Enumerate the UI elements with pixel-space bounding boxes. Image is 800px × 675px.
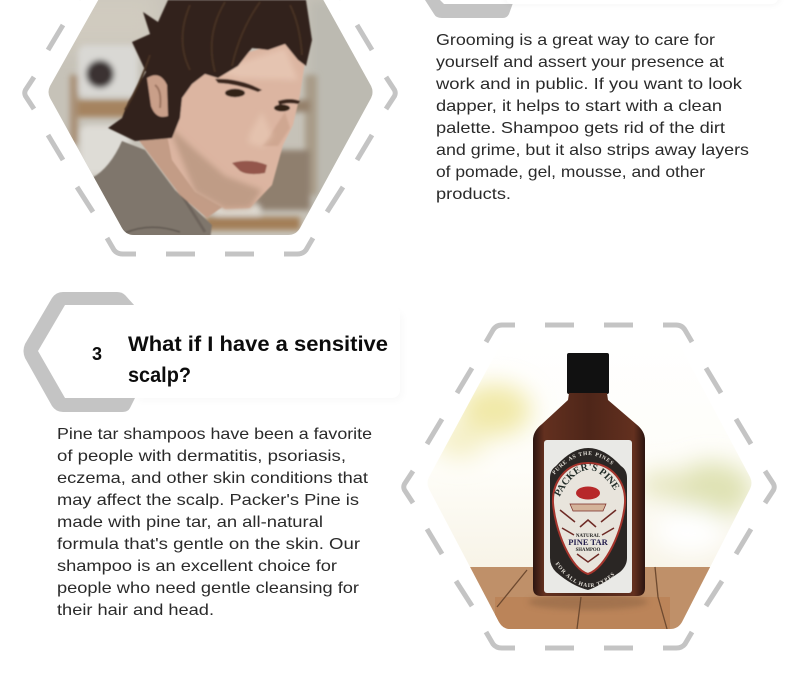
text: grooming paragraph: Grooming is a great way to care for — [436, 32, 716, 49]
text: sensitive scalp paragraph: people who need gentle cleansing for — [57, 580, 360, 597]
man figure — [92, 0, 312, 240]
heading: What if I have a sensitive — [128, 333, 388, 356]
eyes — [225, 89, 245, 97]
lips — [232, 161, 267, 174]
number badge: inner white — [38, 305, 140, 398]
section 2 header fragment — [425, 0, 780, 18]
text: sensitive scalp paragraph: made with pine tar, an all-natural — [57, 514, 323, 531]
face — [165, 40, 305, 209]
text: sensitive scalp paragraph: formula that's gentle on the skin. Our — [57, 536, 361, 553]
text: grooming paragraph: and grime, but it also strips away layers — [436, 142, 749, 159]
nose — [265, 114, 290, 146]
brows — [215, 79, 262, 92]
wood table — [470, 567, 710, 629]
bottle label: PINE TAR — [568, 537, 609, 547]
neck — [139, 138, 222, 217]
section 3 header: scalp? — [128, 364, 191, 387]
text: grooming paragraph: products. — [436, 186, 511, 203]
text: sensitive scalp paragraph: Pine tar shampoos have been a favorite — [57, 426, 372, 443]
number 3: 3 — [92, 344, 102, 364]
text: grooming paragraph: of pomade, gel, mousse, and other — [436, 164, 706, 181]
text: sensitive scalp paragraph: may affect the scalp. Packer's Pine is — [57, 492, 359, 509]
ear — [147, 75, 168, 119]
text: grooming paragraph — [435, 32, 749, 203]
text: sensitive scalp paragraph: their hair and head. — [57, 602, 214, 619]
photo: shampoo bottle in hexagon — [428, 353, 752, 629]
text: sensitive scalp paragraph: of people with dermatitis, psoriasis, — [57, 448, 346, 465]
bottle label: PACKER'S PINE — [554, 464, 620, 497]
blurred background blobs — [434, 384, 752, 554]
number badge: gray hexagon — [24, 292, 135, 412]
text: sensitive scalp paragraph: eczema, and other skin conditions that — [57, 470, 369, 487]
hair — [108, 0, 312, 141]
bottle label: SHAMPOO — [576, 548, 601, 553]
blurred background shelf right — [205, 75, 317, 230]
bottle label — [544, 440, 632, 593]
bottle label: FOR ALL HAIR TYPES — [555, 562, 614, 588]
bottle label: NATURAL — [576, 534, 601, 539]
text: grooming paragraph: palette. Shampoo gets rid of the dirt — [436, 120, 726, 137]
text: sensitive scalp paragraph — [57, 426, 372, 619]
dashed hexagon outline: bottle photo — [404, 325, 774, 648]
text: grooming paragraph: yourself and assert your presence at — [436, 54, 725, 71]
blurred speaker on shelf — [70, 45, 138, 175]
text: grooming paragraph: dapper, it helps to start with a clean — [436, 98, 722, 115]
header card — [135, 311, 403, 401]
bottle — [533, 353, 645, 596]
section 3 header — [24, 292, 403, 412]
label text: PURE AS THE PINES — [552, 451, 614, 475]
shirt — [92, 141, 212, 240]
photo: man in hexagon — [40, 0, 380, 240]
dashed hexagon outline: man photo — [25, 0, 395, 254]
text: sensitive scalp paragraph: shampoo is an excellent choice for — [57, 558, 338, 575]
text: grooming paragraph: work and in public. If you want to look — [435, 76, 743, 93]
